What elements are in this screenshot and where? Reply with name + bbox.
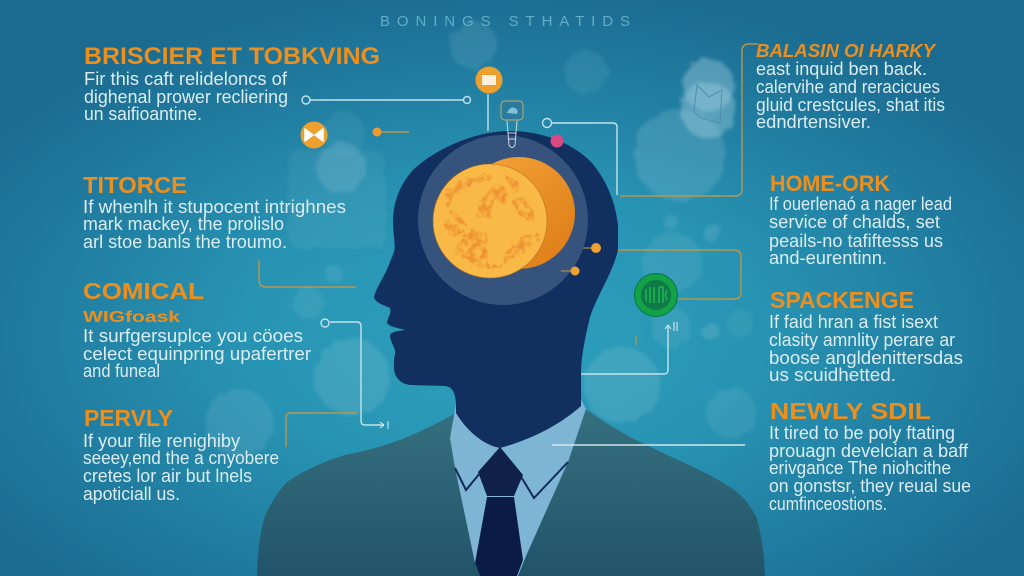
connector lines — [259, 44, 758, 447]
icon: bow tie badge — [300, 122, 328, 148]
heading: BALASIN OI HARKY — [756, 41, 937, 61]
text block: edndrtensiver. — [756, 112, 871, 132]
tie — [475, 447, 523, 576]
icon: orange node top left — [372, 128, 382, 136]
text block: gluid crestcules, shat itis — [756, 95, 945, 115]
text block: calervihe and reracicues — [756, 77, 940, 97]
rear disc — [463, 157, 575, 269]
text block: It tired to be poly ftating — [769, 423, 955, 443]
panel: right 2 — [769, 171, 952, 268]
collar outline — [455, 462, 568, 498]
text block: If your file renighiby — [83, 431, 240, 451]
icon: green badge — [634, 274, 678, 316]
text block: mark mackey, the prolislo — [83, 214, 284, 234]
white connector over suit — [552, 444, 745, 446]
heading: COMICAL — [83, 278, 204, 304]
text block: cretes lor air but lnels — [83, 466, 252, 486]
panel: left 2 — [83, 172, 346, 252]
text block: If faid hran a fist isext — [769, 312, 938, 332]
panel: left 3 — [83, 278, 311, 381]
text block: erivgance The niohcithe — [769, 458, 951, 478]
heading: PERVLY — [84, 405, 173, 431]
brain texture — [444, 174, 540, 268]
text block — [769, 194, 952, 268]
icon: orange document badge — [476, 66, 502, 94]
panel: right 3 — [769, 287, 963, 385]
text block: us scuidhetted. — [769, 365, 896, 385]
heading: HOME-ORK — [770, 171, 890, 196]
shirt and collar — [450, 400, 586, 576]
tie blade — [475, 497, 523, 576]
text block — [84, 69, 288, 124]
figure: businessman silhouette — [257, 131, 765, 576]
icon: orange nodes at head — [561, 243, 601, 276]
text block: peails-no tafiftesss us — [769, 231, 943, 251]
text block: un saifioantine. — [84, 104, 202, 124]
text block — [83, 326, 311, 381]
text block: dighenal prower recliering — [84, 87, 288, 107]
text block: seeey,end the a cnyobere — [83, 448, 279, 468]
text block: If whenlh it stupocent intrighnes — [83, 197, 346, 217]
brain halo — [418, 135, 588, 305]
heading: NEWLY SDIL — [770, 398, 931, 424]
icon: probe device — [501, 101, 523, 148]
text block: Fir this caft relideloncs of — [84, 69, 288, 89]
text block: apoticiall us. — [83, 484, 180, 504]
icon: small arrow glyphs — [380, 322, 677, 429]
heading: TITORCE — [83, 172, 187, 198]
text block: It surfgersuplce you cöoes — [83, 326, 303, 346]
panel: left 1 — [84, 43, 380, 124]
text block: and-eurentinn. — [769, 248, 887, 268]
text block: celect equinpring upafertrer — [83, 344, 311, 364]
text block: east inquid ben back. — [756, 59, 927, 79]
front disc — [433, 164, 547, 278]
icon: pink dot — [550, 134, 564, 148]
text block: service of chalds, set — [769, 212, 940, 232]
panel: left 4 — [83, 405, 279, 504]
text block — [83, 197, 346, 252]
head silhouette — [374, 131, 618, 448]
brain: orange overlapping discs — [433, 157, 575, 278]
heading: SPACKENGE — [770, 287, 914, 313]
subheading: WIGfoask — [83, 309, 180, 326]
heading: BRISCIER ET TOBKVING — [84, 43, 380, 70]
text block: and funeal — [83, 361, 160, 381]
panel: right 1 — [756, 41, 945, 132]
text block: clasity amnlity perare ar — [769, 330, 955, 350]
text block — [756, 59, 945, 132]
text block: boose angldenittersdas — [769, 348, 963, 368]
text block — [769, 423, 971, 514]
text block: arl stoe banls the troumo. — [83, 232, 287, 252]
panel: right 4 — [769, 398, 971, 514]
suit jacket — [257, 409, 765, 576]
text block: on gonstsr, they reual sue — [769, 476, 971, 496]
text block: prouagn develcian a baff — [769, 441, 969, 461]
text block — [83, 431, 279, 504]
tie knot — [478, 447, 523, 496]
title: BONINGS STHATIDS — [380, 13, 630, 30]
text block — [769, 312, 963, 385]
text block: cumfinceostions. — [769, 494, 887, 514]
background cloud motifs — [205, 21, 756, 457]
text block: If ouerlenaó a nager lead — [769, 194, 952, 214]
icon: sketch inside cloud — [694, 85, 722, 123]
